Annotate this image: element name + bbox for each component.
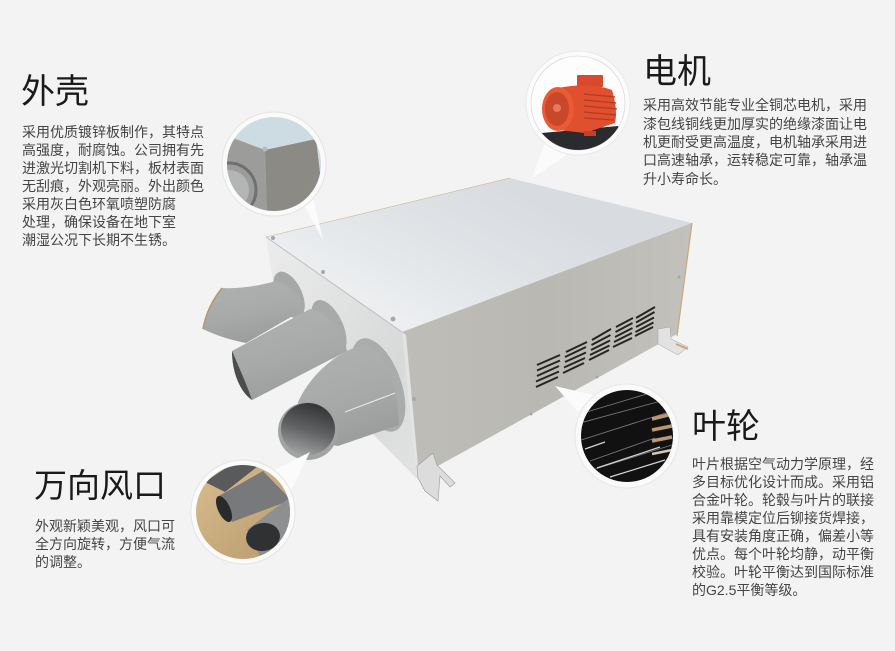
description <box>643 97 867 187</box>
description: 升小寿命长。 <box>643 171 727 187</box>
callout: impeller <box>555 384 679 488</box>
description: 的G2.5平衡等级。 <box>692 582 806 598</box>
product: ventilation unit <box>203 178 692 501</box>
ventilation louvres <box>536 307 655 387</box>
pointer <box>275 452 310 492</box>
duct 2 <box>232 295 354 400</box>
callout: motor <box>526 50 630 156</box>
motor photo <box>542 75 618 150</box>
heading: 外壳 <box>21 73 89 111</box>
zoom circle <box>191 460 295 564</box>
heading: 电机 <box>643 53 711 91</box>
impeller photo <box>578 390 675 485</box>
cabinet right face <box>402 223 692 478</box>
zoom circle <box>526 51 630 155</box>
heading: 叶轮 <box>692 408 760 446</box>
description: 采用高效节能专业全铜芯电机，采用 <box>643 97 867 113</box>
callout: shell <box>222 112 326 240</box>
shell detail photo <box>227 117 321 211</box>
screws <box>271 236 680 416</box>
description: 无刮痕，外观亮丽。外出颜色 <box>22 178 204 194</box>
description <box>35 518 175 570</box>
description: 优点。每个叶轮均静，动平衡 <box>692 546 874 562</box>
description: 高强度，耐腐蚀。公司拥有先 <box>22 142 204 158</box>
zoom circle <box>575 384 679 488</box>
mounting brackets <box>417 327 688 501</box>
description: 的调整。 <box>35 554 91 570</box>
description: 潮湿公况下长期不生锈。 <box>22 232 176 248</box>
cabinet top face <box>266 178 692 332</box>
text: motor <box>643 53 867 187</box>
text: impeller <box>692 408 874 598</box>
description <box>22 124 204 248</box>
duct 1 <box>203 267 311 343</box>
heading: 万向风口 <box>34 467 166 504</box>
duct 3 <box>278 331 416 460</box>
description: 合金叶轮。轮毂与叶片的联接 <box>692 492 874 508</box>
description: 进激光切割机下料，板材表面 <box>22 160 204 176</box>
description: 外观新颖美观，风口可 <box>35 518 175 534</box>
description: 校验。叶轮平衡达到国际标准 <box>692 564 874 580</box>
text: vent <box>34 467 175 570</box>
description: 采用灰白色环氧喷塑防腐 <box>22 196 176 212</box>
description: 漆包线铜线更加厚实的绝缘漆面让电 <box>643 116 867 132</box>
vent photo <box>195 463 291 560</box>
pointer <box>305 198 323 240</box>
description: 多目标优化设计而成。采用铝 <box>692 474 874 490</box>
pointer <box>555 386 593 412</box>
description: 具有安装角度正确，偏差小等 <box>692 528 874 544</box>
description: 叶片根据空气动力学原理，经 <box>692 456 874 472</box>
description: 采用优质镀锌板制作，其特点 <box>22 124 204 140</box>
description: 口高速轴承，运转稳定可靠，轴承温 <box>643 152 867 168</box>
description: 采用靠模定位后铆接货焊接， <box>692 510 874 526</box>
callout: vent <box>191 452 310 564</box>
pointer <box>532 143 567 178</box>
cabinet left face <box>266 237 416 478</box>
text: shell <box>21 73 204 248</box>
description: 全方向旋转，方便气流 <box>35 536 175 552</box>
description: 机更耐受更高温度，电机轴承采用进 <box>643 134 867 150</box>
description: 处理，确保设备在地下室 <box>22 214 176 230</box>
description <box>692 456 874 598</box>
zoom circle <box>222 112 326 216</box>
